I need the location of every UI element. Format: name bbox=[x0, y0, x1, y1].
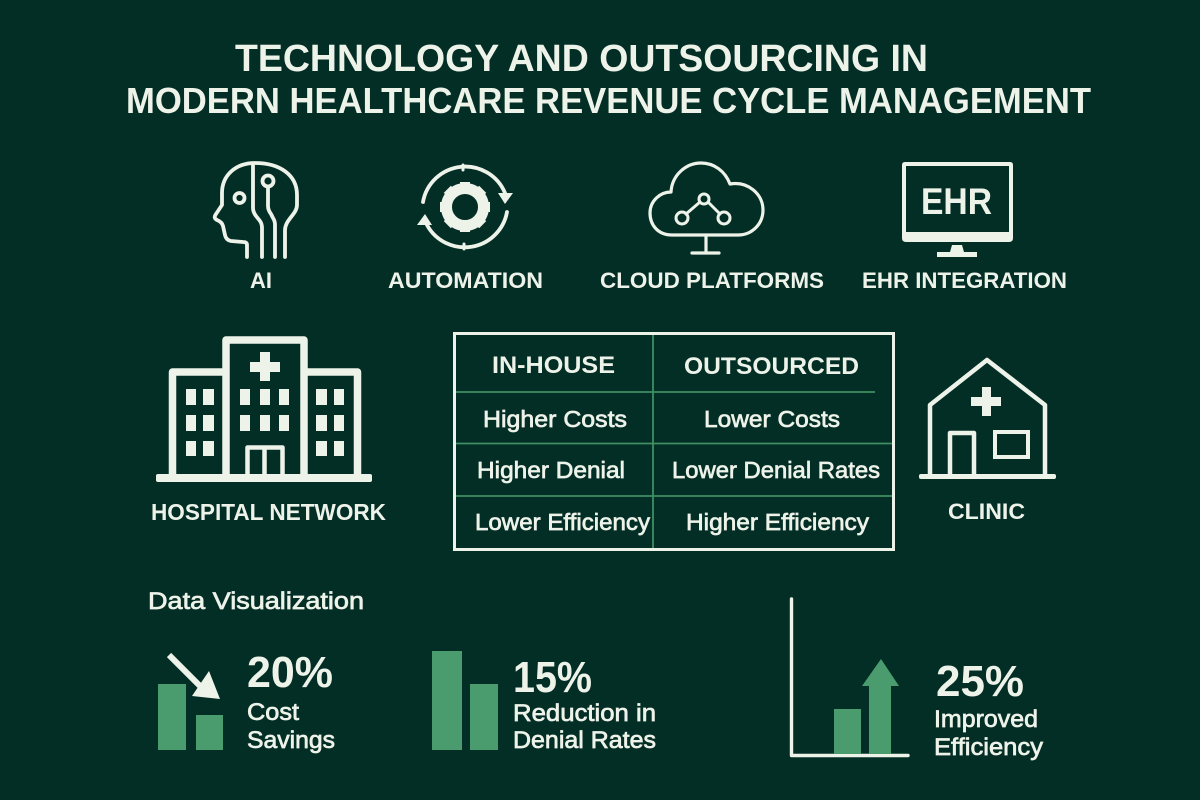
icon: clinic building bbox=[919, 360, 1056, 479]
caption: improved efficiency: Improved bbox=[934, 706, 1038, 733]
label: automation: AUTOMATION bbox=[388, 268, 543, 293]
icon: EHR monitor bbox=[902, 162, 1013, 257]
title bbox=[126, 38, 1091, 121]
panel: hospital network bbox=[151, 340, 386, 525]
value: 25%: 25% bbox=[936, 657, 1024, 706]
panel: cloud platforms bbox=[600, 163, 824, 293]
icon: EHR monitor: EHR bbox=[921, 181, 992, 222]
panel: AI bbox=[215, 163, 297, 293]
column: in-house: Higher Denial bbox=[477, 457, 625, 483]
chart: cost bars bbox=[158, 684, 223, 750]
table grid lines bbox=[456, 335, 892, 548]
column: outsourced: OUTSOURCED bbox=[684, 353, 859, 380]
label: cloud platforms: CLOUD PLATFORMS bbox=[600, 268, 824, 293]
column: outsourced: Lower Costs bbox=[704, 406, 840, 432]
column: in-house: Lower Efficiency bbox=[475, 509, 650, 535]
panel: comparison table bbox=[454, 334, 894, 550]
title: TECHNOLOGY AND OUTSOURCING IN bbox=[235, 38, 928, 80]
title: MODERN HEALTHCARE REVENUE CYCLE MANAGEMENT bbox=[126, 80, 1091, 121]
icon: AI head bbox=[215, 163, 297, 257]
heading: data visualization: Data Visualization bbox=[148, 588, 364, 615]
column: outsourced bbox=[672, 353, 880, 535]
caption: improved efficiency bbox=[934, 706, 1043, 761]
panel: automation bbox=[388, 165, 543, 293]
caption: cost savings bbox=[247, 699, 335, 754]
table frame bbox=[454, 334, 894, 550]
chart: denial bars bbox=[432, 651, 498, 750]
column: outsourced: Lower Denial Rates bbox=[672, 457, 880, 483]
panel: efficiency stat bbox=[792, 599, 1043, 761]
caption: reduction in denial rates: Reduction in bbox=[513, 700, 656, 727]
panel: clinic bbox=[919, 360, 1056, 524]
caption: reduction in denial rates bbox=[513, 700, 656, 754]
caption: cost savings: Cost bbox=[247, 699, 299, 726]
label: AI: AI bbox=[250, 268, 272, 293]
caption: cost savings: Savings bbox=[247, 727, 335, 754]
panel: denial rates stat bbox=[432, 651, 656, 754]
caption: improved efficiency: Efficiency bbox=[934, 734, 1043, 761]
icon: gear with cycle arrows bbox=[417, 165, 513, 249]
panel: EHR integration bbox=[862, 162, 1067, 293]
column: in-house bbox=[475, 352, 650, 535]
column: in-house: IN-HOUSE bbox=[492, 352, 615, 379]
label: clinic: CLINIC bbox=[948, 499, 1025, 524]
label: EHR integration: EHR INTEGRATION bbox=[862, 268, 1067, 293]
caption: reduction in denial rates: Denial Rates bbox=[513, 727, 656, 754]
column: in-house: Higher Costs bbox=[483, 406, 627, 432]
value: 15%: 15% bbox=[513, 653, 592, 702]
panel: cost savings stat bbox=[158, 648, 335, 754]
chart: efficiency axes, bar and arrow bbox=[792, 599, 908, 756]
icon: hospital building bbox=[156, 340, 372, 482]
label: hospital network: HOSPITAL NETWORK bbox=[151, 499, 386, 525]
column: outsourced: Higher Efficiency bbox=[686, 509, 869, 535]
icon: cloud network bbox=[650, 163, 763, 253]
value: 20%: 20% bbox=[247, 648, 333, 697]
arrow: downward bbox=[169, 655, 220, 699]
